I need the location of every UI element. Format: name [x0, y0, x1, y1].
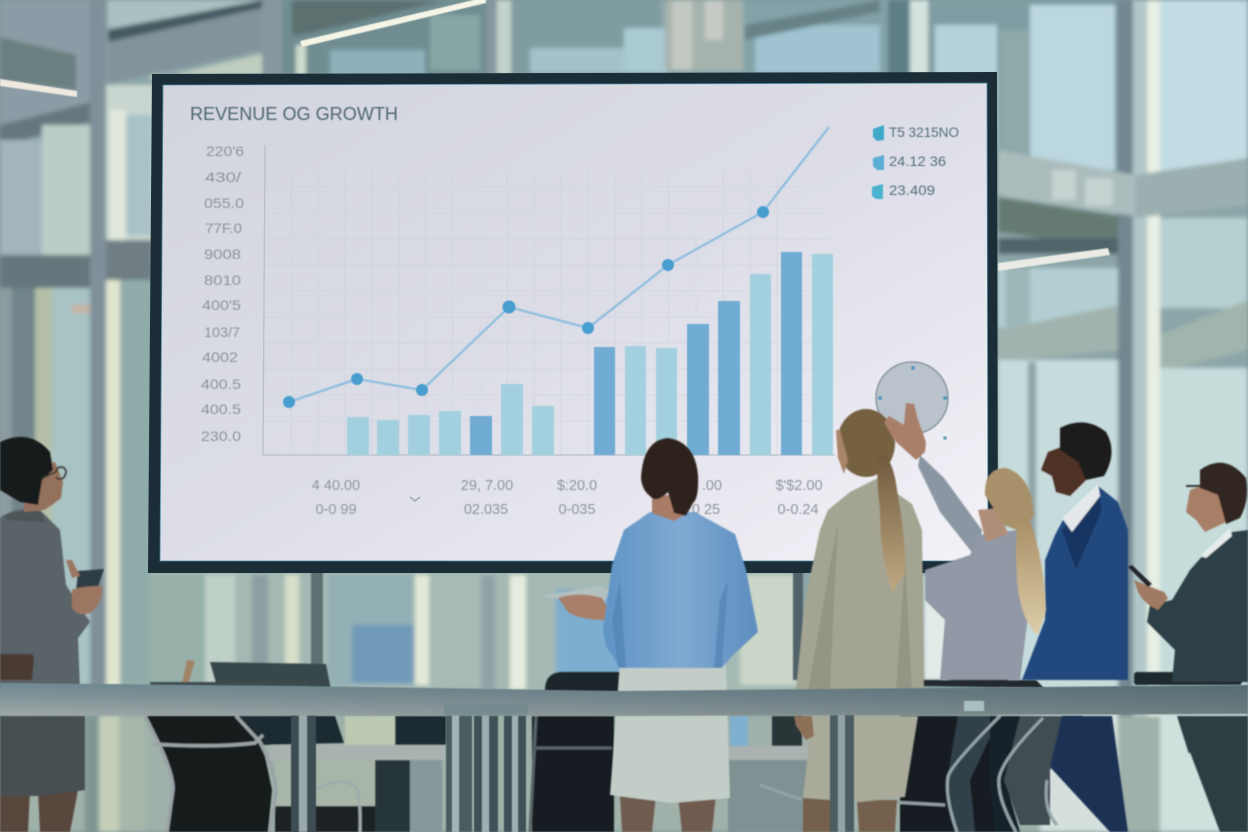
- legend: [872, 125, 959, 199]
- x axis value labels: 0 25: [692, 502, 720, 518]
- x axis value labels: 0-0 99: [315, 502, 357, 518]
- legend: T5 3215NO: [889, 125, 959, 140]
- legend: 24.12 36: [889, 154, 946, 169]
- tablet: [540, 586, 610, 601]
- line chart: [283, 127, 829, 408]
- left woman jacket: [0, 509, 90, 690]
- blonde woman hair: [985, 468, 1034, 532]
- person: blonde woman pointing at the screen: [884, 403, 1046, 680]
- beige suit woman hand: [794, 716, 814, 740]
- left woman neck and face: [24, 462, 63, 512]
- right chairs: [922, 663, 1044, 688]
- x axis value labels: 29, 7.00: [461, 478, 513, 494]
- x axis value labels: 02.035: [464, 502, 508, 518]
- right side panes: [928, 0, 1118, 160]
- dark suit man hands and phone: [1128, 565, 1168, 610]
- blue shirt woman neck: [652, 495, 688, 521]
- person: woman at far left with tablet: [0, 437, 104, 832]
- navy suit man hair: [1060, 422, 1112, 480]
- railing bar: [0, 683, 1248, 716]
- jacket shading: [808, 520, 912, 690]
- left lower glass: [0, 288, 12, 688]
- railing bracket: [964, 701, 984, 711]
- beige suit woman face edge: [836, 430, 848, 474]
- y axis labels: 77F.0: [205, 220, 242, 236]
- left woman hair: [0, 437, 53, 505]
- chart gridlines: [264, 170, 830, 455]
- chart axes: [263, 145, 835, 455]
- hanging plant: [665, 0, 743, 70]
- x axis value labels: 0-0.24: [777, 502, 819, 518]
- dark suit man face: [1186, 480, 1226, 532]
- shirt shading: [612, 580, 728, 668]
- x axis value labels: 0-035: [558, 502, 596, 518]
- top centre panes: [282, 0, 490, 75]
- right chair tray: [1134, 672, 1242, 685]
- y axis labels: 430/: [205, 169, 241, 185]
- person: man in dark suit at far right: [1128, 463, 1248, 832]
- wooden item: [0, 654, 34, 680]
- right desk: [730, 716, 748, 746]
- white collar: [1062, 484, 1100, 532]
- monitor frame: [148, 72, 998, 573]
- gauge circle: [876, 362, 948, 440]
- blue shirt woman hand: [558, 594, 610, 620]
- upper left ceiling: [0, 0, 92, 130]
- pane beside the screen: [106, 85, 156, 240]
- navy suit man face: [1041, 440, 1086, 496]
- x axis value labels: 4 40.00: [312, 478, 360, 494]
- jacket collar: [4, 511, 46, 522]
- blonde woman jacket: [925, 530, 1030, 680]
- beige jacket: [796, 478, 924, 690]
- person: man in navy suit: [1022, 422, 1128, 832]
- person: woman in blue shirt: [540, 438, 758, 832]
- pointing hand: [884, 403, 926, 460]
- left woman skirt: [0, 716, 85, 796]
- upper beams: [108, 0, 262, 28]
- centre chair: [545, 672, 621, 692]
- pen on desk: [182, 660, 195, 684]
- y axis labels: 9008: [204, 246, 241, 262]
- beige suit woman ponytail: [877, 455, 905, 592]
- dark suit man glasses: [1186, 485, 1200, 487]
- blonde woman ponytail: [1016, 518, 1046, 635]
- y axis labels: 230.0: [201, 428, 241, 444]
- foreground railing: [0, 683, 1248, 832]
- y axis labels: 103/7: [204, 324, 240, 340]
- pillars: [90, 0, 106, 690]
- laptop behind rail: [210, 662, 331, 690]
- blonde woman neck: [978, 508, 1008, 542]
- lower glass: [0, 716, 1248, 832]
- blue shirt: [603, 512, 758, 668]
- white collar: [1200, 528, 1232, 558]
- y axis labels: 8010: [204, 272, 241, 288]
- lapel shadow: [1062, 490, 1102, 570]
- dark suit jacket: [1147, 530, 1248, 682]
- left chair: [146, 716, 272, 832]
- dark suit man hair: [1200, 463, 1247, 524]
- beige suit woman head: [837, 409, 895, 477]
- screen stand: [311, 570, 803, 690]
- navy suit jacket: [1022, 486, 1128, 680]
- railing shade: [0, 683, 1248, 716]
- x axis value labels: $'$2.00: [775, 478, 823, 494]
- railing posts: [291, 706, 854, 832]
- y axis labels: 4002: [202, 349, 238, 365]
- chevron mark: [410, 497, 420, 501]
- beige suit woman legs: [803, 798, 897, 832]
- ceiling lights: [0, 0, 1110, 271]
- second laptop and desk: [240, 716, 344, 745]
- blue shirt woman legs: [620, 795, 716, 832]
- left woman glasses: [42, 467, 66, 479]
- blue shirt woman hair: [641, 438, 698, 516]
- beige suit woman shorts: [803, 716, 918, 802]
- y axis labels: 220'6: [206, 143, 244, 159]
- below screen glass: [150, 572, 800, 692]
- right beams: [998, 150, 1135, 216]
- left woman legs: [0, 790, 78, 832]
- dark suit trousers: [1177, 716, 1248, 832]
- navy suit trousers: [1050, 716, 1128, 832]
- legend: 23.409: [889, 183, 935, 198]
- y axis labels: [201, 143, 244, 444]
- left woman hand and tablet: [66, 560, 104, 614]
- x axis value labels: $:20.0: [557, 478, 597, 494]
- person: woman in beige suit with long ponytail: [794, 409, 924, 832]
- furniture: table, laptop and chairs: [145, 660, 1242, 832]
- y axis labels: 400'5: [202, 297, 241, 313]
- y axis labels: 400.5: [201, 376, 241, 392]
- x axis value labels: [312, 478, 823, 518]
- pointing arm: [918, 455, 982, 560]
- bar chart: [347, 252, 833, 455]
- presentation screen: [160, 83, 988, 561]
- y axis labels: 400.5: [201, 401, 241, 417]
- x axis value labels: .00: [702, 478, 722, 494]
- chart title: REVENUE OG GROWTH: [190, 104, 398, 124]
- y axis labels: 055.0: [204, 195, 244, 211]
- blue shirt woman skirt: [610, 662, 730, 803]
